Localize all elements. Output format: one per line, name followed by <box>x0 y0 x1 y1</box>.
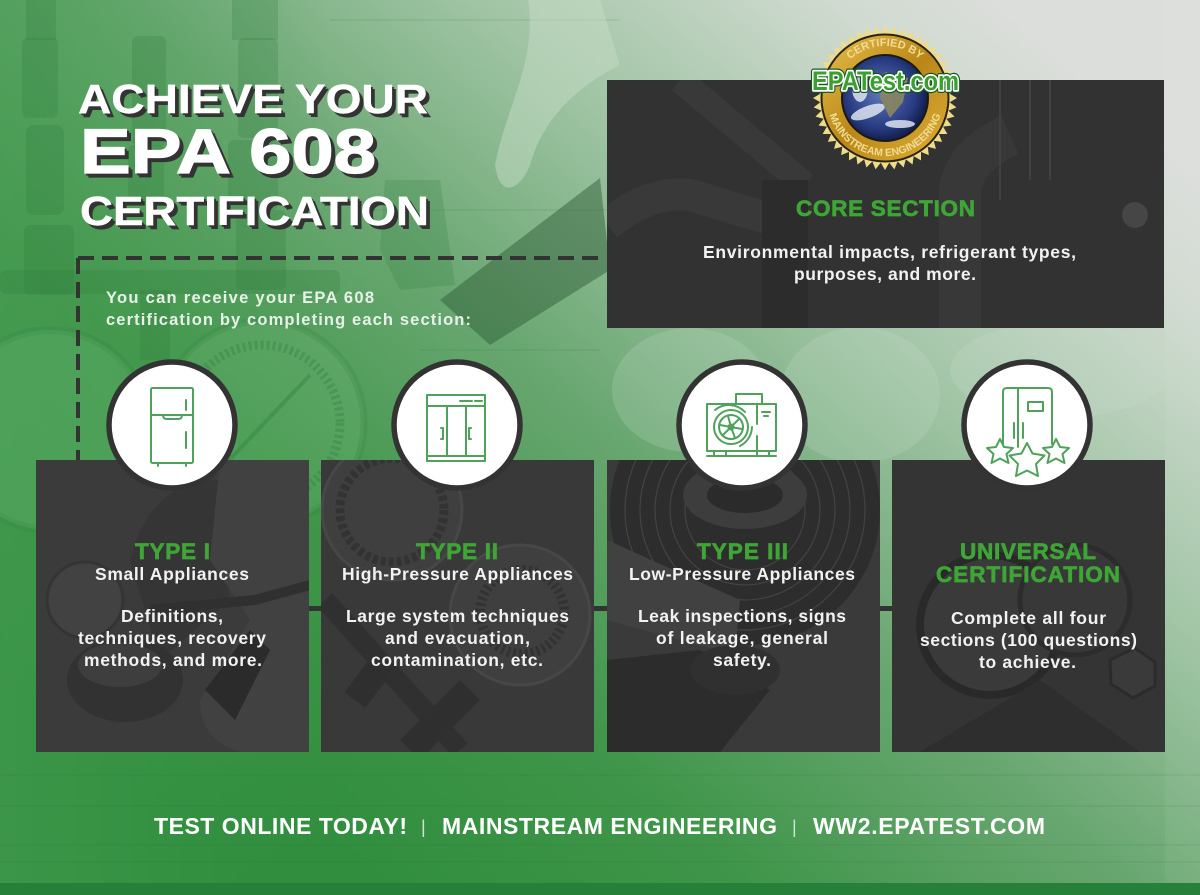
title: EPA 608 <box>82 119 378 189</box>
type III description: safety. <box>713 650 771 670</box>
title: CERTIFICATION <box>82 190 431 236</box>
universal description: sections (100 questions) <box>920 630 1137 650</box>
intro text: You can receive your EPA 608 <box>106 289 374 307</box>
title: CERTIFICATION <box>80 188 429 234</box>
universal description: Complete all four <box>951 608 1106 628</box>
pressure gauges <box>0 321 364 530</box>
type I description: methods, and more. <box>84 650 262 670</box>
panel: universal certification <box>892 460 1165 752</box>
universal description <box>920 608 1137 672</box>
type I description <box>78 606 266 670</box>
panel: type III <box>607 460 880 752</box>
hoses and fittings <box>0 0 340 360</box>
panel connectors <box>309 606 892 611</box>
icon: condenser unit <box>679 362 805 488</box>
title: ACHIEVE YOUR <box>80 78 430 124</box>
universal heading: UNIVERSAL <box>960 539 1096 564</box>
seal badge: MAINSTREAM ENGINEERING <box>830 112 940 156</box>
type II description: and evacuation, <box>385 628 530 648</box>
icon: commercial cabinet <box>394 362 520 488</box>
seal badge: EPATest.com <box>812 66 959 96</box>
type I subtitle: Small Appliances <box>95 564 249 584</box>
type I description: techniques, recovery <box>78 628 266 648</box>
core description <box>703 242 1076 284</box>
type I description: Definitions, <box>121 606 223 626</box>
universal description: to achieve. <box>979 652 1076 672</box>
title: EPA 608 <box>84 121 380 191</box>
panel: type I <box>36 460 310 752</box>
seal badge: EPATest.com <box>812 66 959 96</box>
panel: type II <box>321 440 594 752</box>
towel folds <box>612 322 1170 463</box>
title: EPA 608 <box>80 117 376 187</box>
footer <box>154 813 1045 839</box>
core description: purposes, and more. <box>794 264 976 284</box>
seal badge: CERTIFIED BY <box>847 38 924 58</box>
title: ACHIEVE YOUR <box>82 80 432 126</box>
wrench handle, dark arm and knob <box>495 0 620 188</box>
footer: | <box>421 817 426 837</box>
title: CERTIFICATION <box>84 192 433 238</box>
icon: refrigerator with stars <box>964 362 1090 488</box>
footer: WW2.EPATEST.COM <box>813 813 1045 839</box>
title <box>78 76 433 238</box>
seal badge: EPATest.com <box>812 66 959 96</box>
core description: Environmental impacts, refrigerant types, <box>703 242 1076 262</box>
footer: TEST ONLINE TODAY! <box>154 813 407 839</box>
type III description: of leakage, general <box>656 628 828 648</box>
icon: refrigerator <box>109 362 235 488</box>
intro text: certification by completing each section: <box>106 311 471 329</box>
dashed connector <box>78 258 600 462</box>
type III description: Leak inspections, signs <box>638 606 846 626</box>
core heading: CORE SECTION <box>796 196 975 221</box>
footer: MAINSTREAM ENGINEERING <box>442 813 777 839</box>
type II heading: TYPE II <box>416 539 498 564</box>
universal heading: CERTIFICATION <box>936 562 1120 587</box>
type III subtitle: Low-Pressure Appliances <box>629 564 855 584</box>
seal badge <box>810 26 960 170</box>
universal heading <box>936 539 1120 587</box>
type II description: contamination, etc. <box>371 650 543 670</box>
type III heading: TYPE III <box>697 539 788 564</box>
panel: core section <box>607 80 1164 328</box>
type I heading: TYPE I <box>135 539 210 564</box>
intro text <box>106 289 471 329</box>
type II subtitle: High-Pressure Appliances <box>342 564 573 584</box>
footer: | <box>792 817 797 837</box>
type II description <box>346 606 569 670</box>
type III description <box>638 606 846 670</box>
title: ACHIEVE YOUR <box>78 76 428 122</box>
type II description: Large system techniques <box>346 606 569 626</box>
